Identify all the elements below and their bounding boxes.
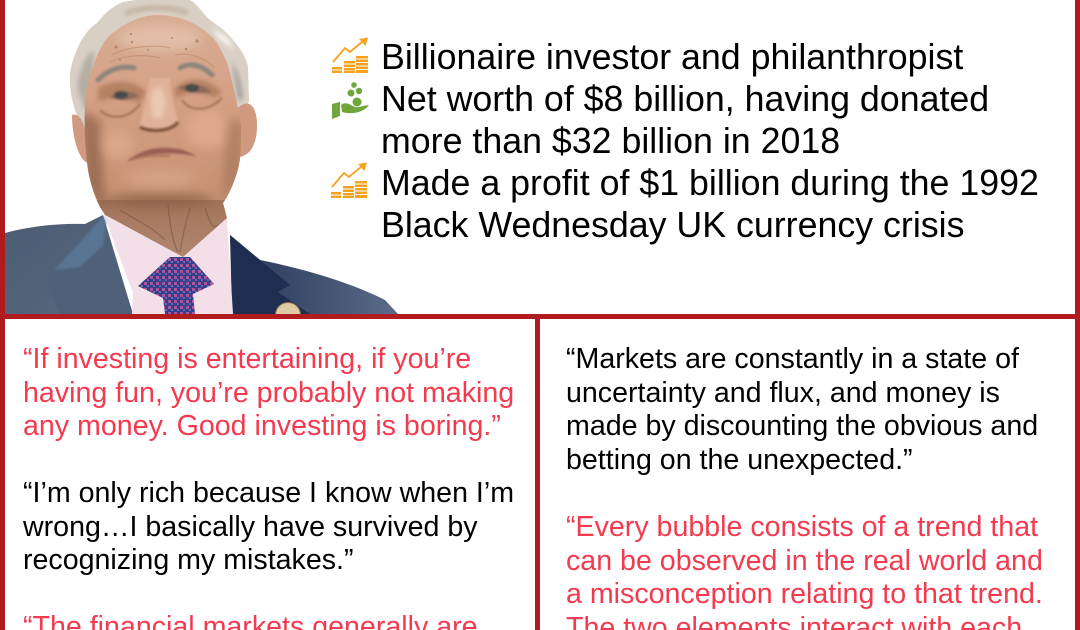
quote: recognizing mistakes: “I’m only rich because I know when I’m (23, 477, 514, 509)
freckles (109, 33, 199, 71)
quote: recognizing mistakes: recognizing my mistakes.” (23, 544, 354, 576)
quote: every bubble: can be observed in the real world and (566, 545, 1043, 577)
eyebrows (98, 65, 212, 80)
portrait photo (5, 0, 398, 314)
quote: investing is boring (23, 343, 514, 442)
suit jacket (5, 215, 398, 314)
lapel pin (276, 302, 300, 328)
biography facts: Made a profit of $1 billion during the 1992 (381, 163, 1039, 203)
quote: uncertainty and flux: betting on the unexpected.” (566, 444, 913, 476)
biography facts: Billionaire investor and philanthropist (381, 37, 963, 77)
tie (138, 257, 214, 314)
nose (140, 78, 178, 130)
quote: every bubble (566, 511, 1043, 630)
icon: hand with coins (332, 82, 369, 119)
biography facts (381, 37, 1039, 245)
quote: uncertainty and flux (566, 343, 1038, 476)
nose highlight (151, 87, 165, 119)
shirt (104, 215, 233, 314)
quote: recognizing mistakes: wrong…I basically have survived by (23, 511, 478, 543)
quote: investing is boring: having fun, you’re probably not making (23, 377, 514, 409)
neck folds (120, 205, 218, 252)
biography facts: more than $32 billion in 2018 (381, 121, 840, 161)
icon: rising coins (331, 162, 367, 198)
quote: investing is boring: any money. Good investing is boring.” (23, 410, 501, 442)
quote: every bubble: “Every bubble consists of a trend that (566, 511, 1038, 543)
face shading (80, 25, 245, 212)
eyes (100, 84, 222, 117)
mouth (128, 148, 197, 161)
biography facts: Net worth of $8 billion, having donated (381, 79, 989, 119)
quote: uncertainty and flux: made by discounting the obvious and (566, 410, 1038, 442)
quote: investing is boring: “If investing is entertaining, if you’re (23, 343, 471, 375)
hair (70, 0, 249, 135)
ears (72, 103, 257, 163)
quote: uncertainty and flux: “Markets are constantly in a state of (566, 343, 1019, 375)
quote: recognizing mistakes (23, 477, 514, 576)
icon: rising coins (332, 38, 368, 73)
hair shading (78, 8, 243, 112)
biography facts: Black Wednesday UK currency crisis (381, 205, 964, 245)
eye sockets (98, 79, 222, 104)
forehead wrinkles (110, 46, 215, 68)
quote: uncertainty and flux: uncertainty and flux, and money is (566, 377, 1000, 409)
face and neck (80, 10, 245, 260)
quote: every bubble: a misconception relating to that trend. (566, 578, 1043, 610)
